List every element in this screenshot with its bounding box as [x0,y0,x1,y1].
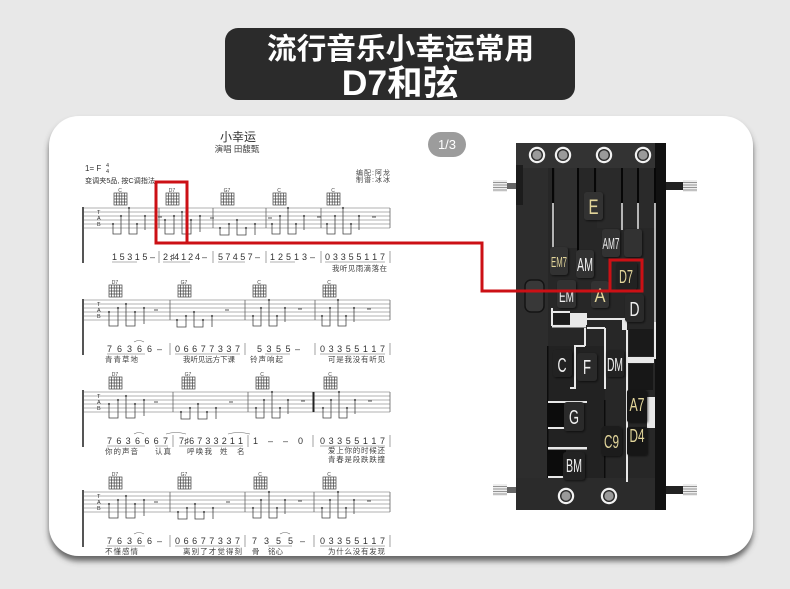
title banner: D7和弦 [342,63,458,103]
score row 1: C [331,188,335,194]
title banner [225,28,575,103]
chord key: AM: AM [577,255,593,275]
key and capo notes: 4 [106,169,109,175]
chord key: D: D [630,299,640,321]
score row 3: 青春是段跌跌撞 [328,454,386,464]
score row 3: 姓 [220,446,228,456]
arranger credits: 制谱:冰冰 [356,175,390,184]
score row 4: 为什么没有发现 [328,546,386,556]
chord key: DM [606,350,624,377]
score row 1: 2 ♯4 1 2 4 – [163,252,207,262]
score row 2: 5 3 5 5 – [257,344,300,354]
score row 4: 0 3 3 5 5 1 1 7 [320,536,385,546]
score row 3: A [97,400,101,406]
score row 3: 0 3 3 5 5 1 1 7 [320,436,385,446]
score row 3: T [97,394,101,400]
chord key: blank [624,229,642,257]
score row 4 [82,472,390,556]
arranger credits [356,168,390,184]
chord key: E: E [588,196,598,219]
score row 3: 1 – – 0 [253,436,303,446]
chord key: C: C [558,355,566,377]
score row 2 [82,280,390,364]
chord key: A [591,281,609,308]
chord key: C9 [601,426,622,456]
chord key: EM7: EM7 [551,254,567,271]
score row 3: D7 [112,372,118,378]
mounting screws [529,147,651,504]
chord key: AM7 [602,229,620,257]
arranger credits: 编配:阿龙 [356,168,390,177]
score row 2: C [257,280,261,286]
score row 2: B [97,314,101,320]
score row 3: C [260,372,264,378]
chord key: A: A [594,286,606,307]
score row 4: 铭心 [268,546,284,556]
score row 1: C [277,188,281,194]
score row 3: G7 [185,372,192,378]
panel: guitar score sheet [82,130,390,556]
chord device [516,143,666,510]
chord key: BM [563,452,585,480]
score row 1: 5 7 4 5 7 – [218,252,260,262]
chord key: F: F [583,357,591,379]
score row 2: A [97,308,101,314]
score row 2: 可是我没有听见 [328,354,386,364]
score row 2: 0 6 6 7 7 3 3 7 [175,344,240,354]
chord key: EM: EM [559,287,574,306]
device body [516,143,666,510]
score row 3 [82,372,390,464]
title banner: 流行音乐小幸运常用 [267,33,534,66]
chord key: EM7 [550,247,568,275]
score title: 演唱 田馥甄 [215,144,260,154]
chord key: G: G [569,407,579,429]
score row 3: 认真 [155,446,172,456]
score row 1: A [97,216,101,222]
score row 4: 0 6 6 7 7 3 3 7 [175,536,240,546]
score row 3: 你的声音 [105,446,138,456]
key and capo notes [85,163,155,185]
score row 2: 青青草地 [105,354,138,364]
score row 2: 铃声响起 [250,354,284,364]
chord key: AM7: AM7 [602,236,620,253]
chord key: A7: A7 [630,395,644,415]
score row 3: 爱上你的时候还 [328,445,386,455]
score row 4: A [97,500,101,506]
score row 4: G7 [181,472,188,478]
chord key: D7 [616,262,637,290]
page indicator: 1/3 [438,137,456,152]
chord key: BM: BM [566,456,582,476]
panel: white card [49,116,753,556]
chord key: F [577,353,597,381]
score row 2: G7 [181,280,188,286]
chord key: A7 [627,390,647,422]
score row 3: 名 [237,446,244,456]
score row 1: 1 5 3 1 5 – [112,252,155,262]
score row 4: 骨 [252,547,260,556]
score title [215,130,260,154]
score row 1: 0 3 3 5 5 1 1 7 [325,252,385,262]
score row 1: G7 [224,188,231,194]
score row 1: 我听见雨滴落在 [332,263,388,273]
score row 4: C [327,472,331,478]
score row 2: 我听见远方下课 [183,354,236,364]
score row 1: 1 2 5 1 3 – [270,252,315,262]
slider pill [525,280,544,312]
score row 4: C [258,472,262,478]
score row 2: 7 6 3 6 6 – [107,344,162,354]
score row 3: 呼唤我 [187,446,212,456]
score row 2: 0 3 3 5 5 1 1 7 [320,344,385,354]
chord key: C [553,350,572,377]
score row 3: 7♯6 7 3 3 2 1 1 [179,436,243,446]
score row 1 [82,188,390,273]
chord key: G [564,402,584,431]
score row 4: T [97,494,101,500]
page indicator [428,132,466,157]
red callout connector from score D7 to device D7 [156,182,642,291]
chord key: D [625,294,644,322]
score row 3: C [328,372,332,378]
score row 1: T [97,210,101,216]
chord key: EM [557,280,576,308]
score row 1: B [97,222,101,228]
dark slots [547,313,653,478]
score row 2: C [327,280,331,286]
key and capo notes: 4 [106,163,109,169]
score title: 小幸运 [220,130,256,144]
chord key: D4 [627,426,647,455]
white maze tracks [548,308,656,482]
score row 4: 不懂感情 [105,546,138,556]
key and capo notes: 变调夹5品, 按C调指法 [85,176,155,185]
chord key: D7: D7 [619,267,633,287]
chord key: AM [576,250,594,278]
score row 4: 7 6 3 6 6 – [107,536,162,546]
score row 3: B [97,406,101,412]
key and capo notes: 1= F [85,164,101,173]
chord key: C9: C9 [604,432,619,452]
score row 2: D7 [112,280,118,286]
side pins [493,180,697,496]
score row 2: T [97,302,101,308]
score row 4: B [97,506,101,512]
score row 4: D7 [112,472,118,478]
chord key: D4: D4 [630,426,644,446]
score row 3: 7 6 3 6 6 6 7 [107,436,168,446]
score row 4: 离别了才觉得刻 [183,546,242,556]
chord key: E [584,192,603,220]
score row 1: D7 [169,188,175,194]
score row 1: C [118,188,122,194]
chord key: DM: DM [607,355,623,375]
score row 4: 7 3 5 5 – [252,536,305,546]
